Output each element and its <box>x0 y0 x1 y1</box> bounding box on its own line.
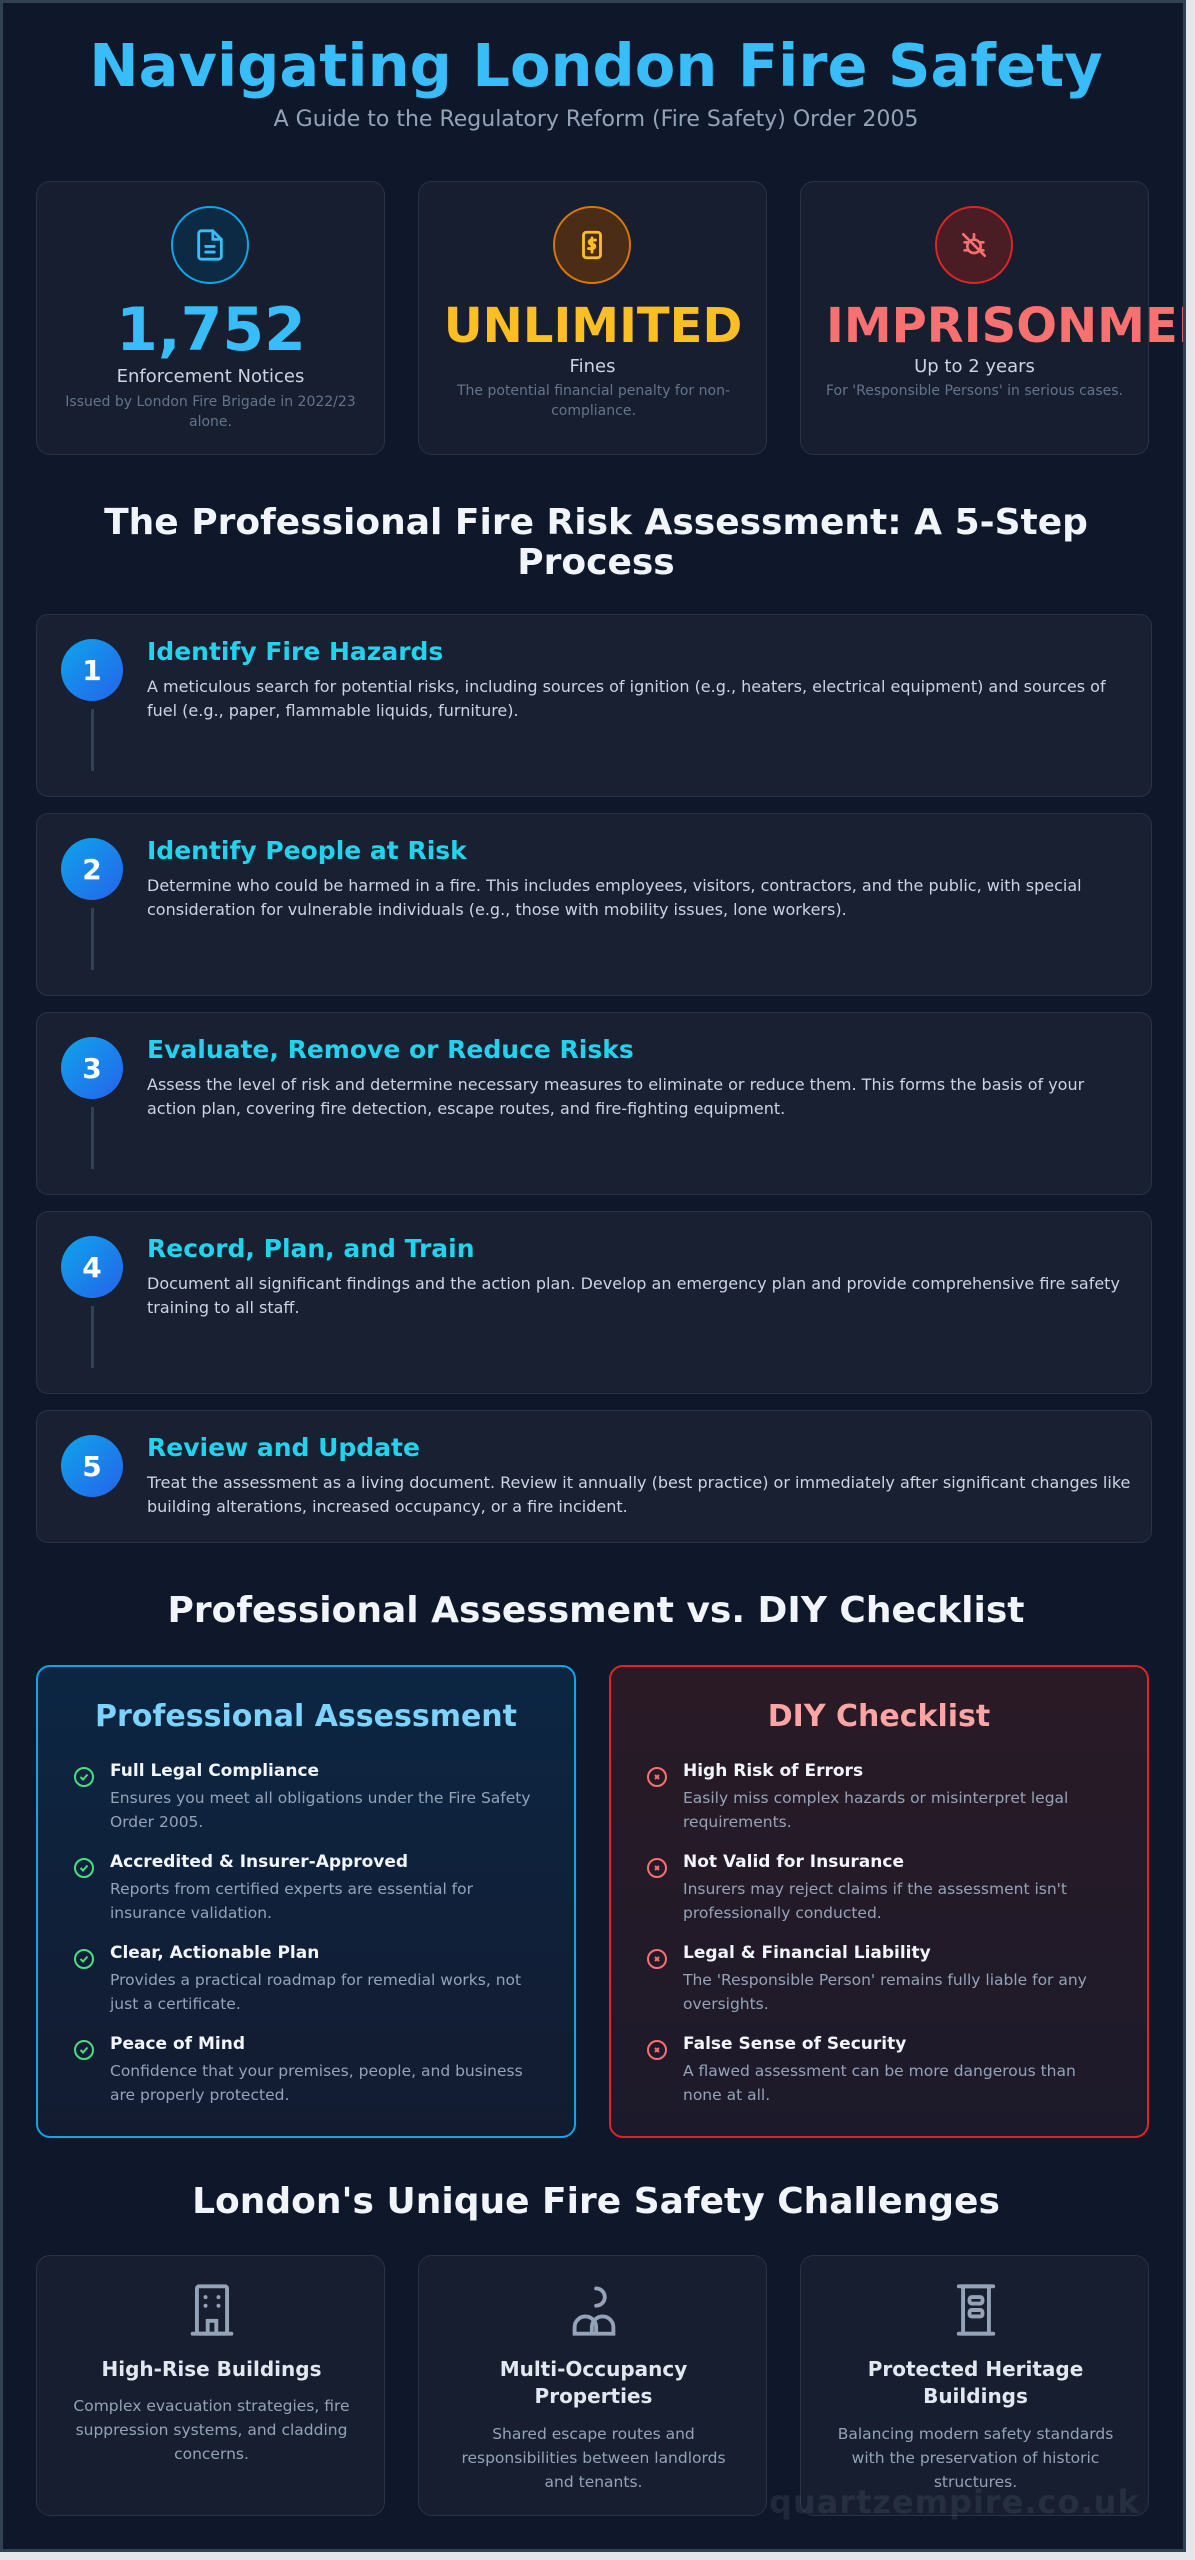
challenge: high-rise: Complex evacuation strategies, fire suppression systems, and cladding concerns. <box>73 2397 350 2463</box>
panel: DIY: Not Valid for Insurance <box>683 1852 904 1872</box>
step 3: Assess the level of risk and determine necessary measures to eliminate or reduce them. This forms the basis of your action plan, covering fire detection, escape routes, and fire-fighting equipment. <box>147 1075 1084 1118</box>
step 1 <box>36 614 1152 797</box>
panel: professional: Ensures you meet all obligations under the Fire Safety Order 2005. <box>110 1789 531 1831</box>
item <box>647 1852 1067 1922</box>
panel: professional <box>36 1665 576 2138</box>
panel: DIY: A flawed assessment can be more dangerous than none at all. <box>683 2062 1076 2104</box>
icon: people <box>572 2286 616 2336</box>
panel: DIY: The 'Responsible Person' remains fully liable for any oversights. <box>683 1971 1087 2013</box>
stat card: imprisonment <box>800 181 1149 455</box>
step 2 <box>36 813 1152 996</box>
panel: DIY: DIY Checklist <box>768 1699 990 1734</box>
panel: DIY: High Risk of Errors <box>683 1761 863 1781</box>
step 4 <box>36 1211 1152 1394</box>
panel: DIY <box>609 1665 1149 2138</box>
item <box>74 1943 521 2013</box>
item <box>647 1943 1087 2013</box>
step 4: Record, Plan, and Train <box>147 1234 475 1263</box>
step 2: 2 <box>82 852 102 886</box>
step 1: 1 <box>82 654 102 686</box>
stat card: enforcement notices: Issued by London Fire Brigade in 2022/23 alone. <box>65 394 356 430</box>
panel: professional: Full Legal Compliance <box>110 1761 319 1781</box>
challenge: multi-occupancy <box>418 2255 767 2516</box>
item <box>647 1761 1068 1831</box>
number: 1,752 <box>116 295 306 365</box>
big text: UNLIMITED <box>444 298 742 354</box>
panel: professional: Provides a practical roadmap for remedial works, not just a certificate. <box>110 1971 521 2013</box>
challenge: heritage: Balancing modern safety standards with the preservation of historic structures. <box>838 2425 1113 2491</box>
stat card: fines: The potential financial penalty for non-compliance. <box>457 383 730 419</box>
challenge: multi-occupancy: Properties <box>535 2384 652 2408</box>
icon: document <box>171 206 249 284</box>
heading: challenges: London's Unique Fire Safety Challenges <box>192 2181 1000 2222</box>
panel: DIY: False Sense of Security <box>683 2034 906 2054</box>
step 5: 5 <box>82 1450 102 1482</box>
panel: professional: Accredited & Insurer-Approved <box>110 1852 408 1872</box>
item <box>74 2034 523 2104</box>
icon: cabinet <box>956 2284 996 2336</box>
step 1: Identify Fire Hazards <box>147 637 443 666</box>
step 5 <box>36 1410 1152 1543</box>
step 5: Treat the assessment as a living document. Review it annually (best practice) or immediately after significant changes like building alterations, increased occupancy, or a fire incident. <box>147 1473 1130 1516</box>
challenge: heritage: Protected Heritage <box>868 2357 1083 2381</box>
step 5: Review and Update <box>147 1433 420 1462</box>
item <box>647 2034 1076 2104</box>
challenge: multi-occupancy: Shared escape routes and responsibilities between landlords and tenants. <box>461 2425 726 2491</box>
panel: DIY: Easily miss complex hazards or misinterpret legal requirements. <box>683 1789 1068 1831</box>
challenge: high-rise: High-Rise Buildings <box>102 2357 321 2381</box>
stat card: imprisonment: For 'Responsible Persons' in serious cases. <box>826 383 1123 399</box>
subtitle: A Guide to the Regulatory Reform (Fire Safety) Order 2005 <box>274 107 918 132</box>
step 1: A meticulous search for potential risks, including sources of ignition (e.g., heaters, electrical equipment) and sources of fuel (e.g., paper, flammable liquids, furniture). <box>147 677 1106 720</box>
icon: building <box>190 2284 234 2336</box>
panel: professional: Peace of Mind <box>110 2034 245 2054</box>
item <box>74 1852 473 1922</box>
stat card: fines <box>418 181 767 455</box>
step 3 <box>36 1012 1152 1195</box>
stat card: enforcement notices: Enforcement Notices <box>117 366 304 387</box>
step 4: 4 <box>82 1250 102 1284</box>
title: Navigating London Fire Safety <box>89 31 1103 100</box>
item <box>74 1761 531 1831</box>
watermark: quartzempire.co.uk <box>769 2483 1140 2521</box>
panel: DIY: Legal & Financial Liability <box>683 1943 931 1963</box>
panel: professional: Confidence that your premises, people, and business are properly protected. <box>110 2062 523 2104</box>
icon: bug/prohibit <box>935 206 1013 284</box>
stat card: fines: Fines <box>570 356 615 377</box>
panel: professional: Professional Assessment <box>95 1699 517 1734</box>
icon: money <box>553 206 631 284</box>
step 3: 3 <box>82 1052 102 1084</box>
challenge: high-rise <box>36 2255 385 2516</box>
panel: professional: Clear, Actionable Plan <box>110 1943 319 1963</box>
panel: DIY: Insurers may reject claims if the assessment isn't professionally conducted. <box>683 1880 1067 1922</box>
step 4: Document all significant findings and the action plan. Develop an emergency plan and provide comprehensive fire safety training to all staff. <box>147 1274 1120 1317</box>
challenge: multi-occupancy: Multi-Occupancy <box>500 2357 687 2381</box>
challenge: heritage: Buildings <box>923 2384 1028 2408</box>
heading: comparison: Professional Assessment vs. DIY Checklist <box>167 1590 1024 1631</box>
step 3: Evaluate, Remove or Reduce Risks <box>147 1035 634 1064</box>
step 2: Determine who could be harmed in a fire. This includes employees, visitors, contractors, and the public, with special consideration for vulnerable individuals (e.g., those with mobility issues, lone workers). <box>147 876 1082 919</box>
challenge: heritage <box>800 2255 1149 2516</box>
panel: professional: Reports from certified experts are essential for insurance validation. <box>110 1880 473 1922</box>
stat card: imprisonment: Up to 2 years <box>914 356 1035 377</box>
step 2: Identify People at Risk <box>147 836 467 865</box>
stat card: enforcement notices <box>36 181 385 455</box>
heading: 5-step process: The Professional Fire Risk Assessment: A 5-Step Process <box>104 502 1088 583</box>
